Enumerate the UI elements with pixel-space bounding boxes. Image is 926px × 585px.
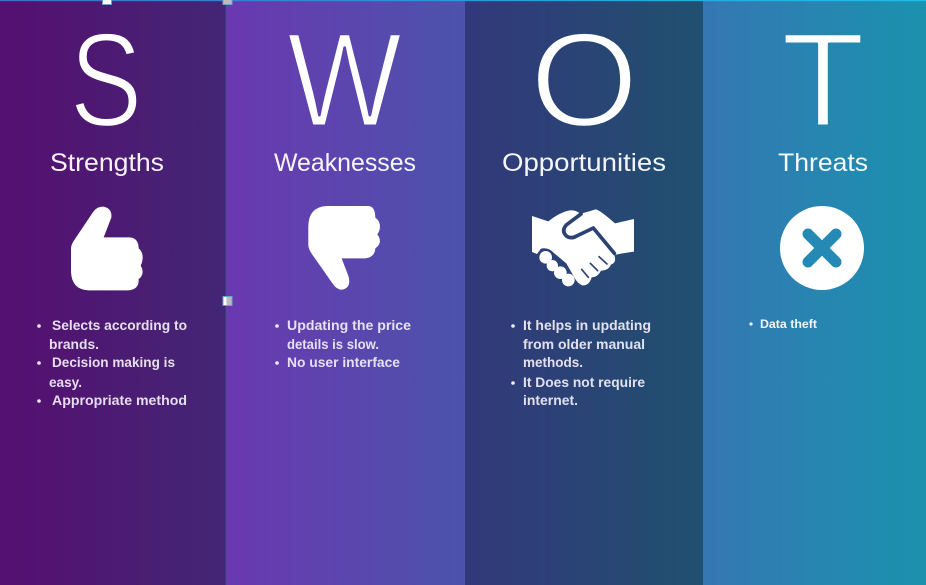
list: weaknesses: No user interface bbox=[287, 354, 400, 370]
list: strengths: Decision making is bbox=[52, 354, 175, 370]
letter O: O bbox=[530, 6, 638, 155]
list: weaknesses: Updating the price bbox=[287, 317, 411, 333]
list: opportunities: methods. bbox=[523, 354, 583, 370]
list: weaknesses: details is slow. bbox=[287, 336, 379, 352]
heading: strengths: Strengths bbox=[50, 149, 164, 177]
heading: opportunities: Opportunities bbox=[502, 149, 666, 177]
panel: strengths bbox=[0, 0, 226, 585]
list: opportunities: internet. bbox=[523, 392, 578, 408]
heading: threats: Threats bbox=[778, 149, 868, 177]
icon: handshake bbox=[532, 209, 634, 286]
icon: x circle bbox=[780, 206, 864, 290]
selection handles bbox=[102, 0, 232, 306]
list: strengths bbox=[37, 317, 187, 408]
letter S: S bbox=[70, 6, 142, 155]
letter T: T bbox=[781, 6, 865, 155]
icon: thumbs down bbox=[308, 206, 380, 290]
list: weaknesses bbox=[275, 317, 411, 370]
heading: weaknesses: Weaknesses bbox=[274, 149, 416, 177]
knuckles bbox=[539, 251, 575, 286]
list: strengths: Appropriate method bbox=[52, 392, 187, 408]
panel: threats bbox=[703, 0, 926, 585]
list: strengths: Selects according to bbox=[52, 317, 187, 333]
icon: thumbs up bbox=[71, 207, 143, 290]
list: opportunities: from older manual bbox=[523, 336, 645, 352]
panel: opportunities bbox=[465, 0, 703, 585]
list: threats: Data theft bbox=[760, 317, 817, 331]
list: opportunities: It helps in updating bbox=[523, 317, 651, 333]
list: opportunities: It Does not require bbox=[523, 374, 645, 390]
panel: weaknesses bbox=[226, 0, 465, 585]
letter W: W bbox=[287, 6, 402, 155]
list: strengths: brands. bbox=[49, 336, 99, 352]
list: opportunities bbox=[511, 317, 651, 408]
list: strengths: easy. bbox=[49, 374, 82, 390]
